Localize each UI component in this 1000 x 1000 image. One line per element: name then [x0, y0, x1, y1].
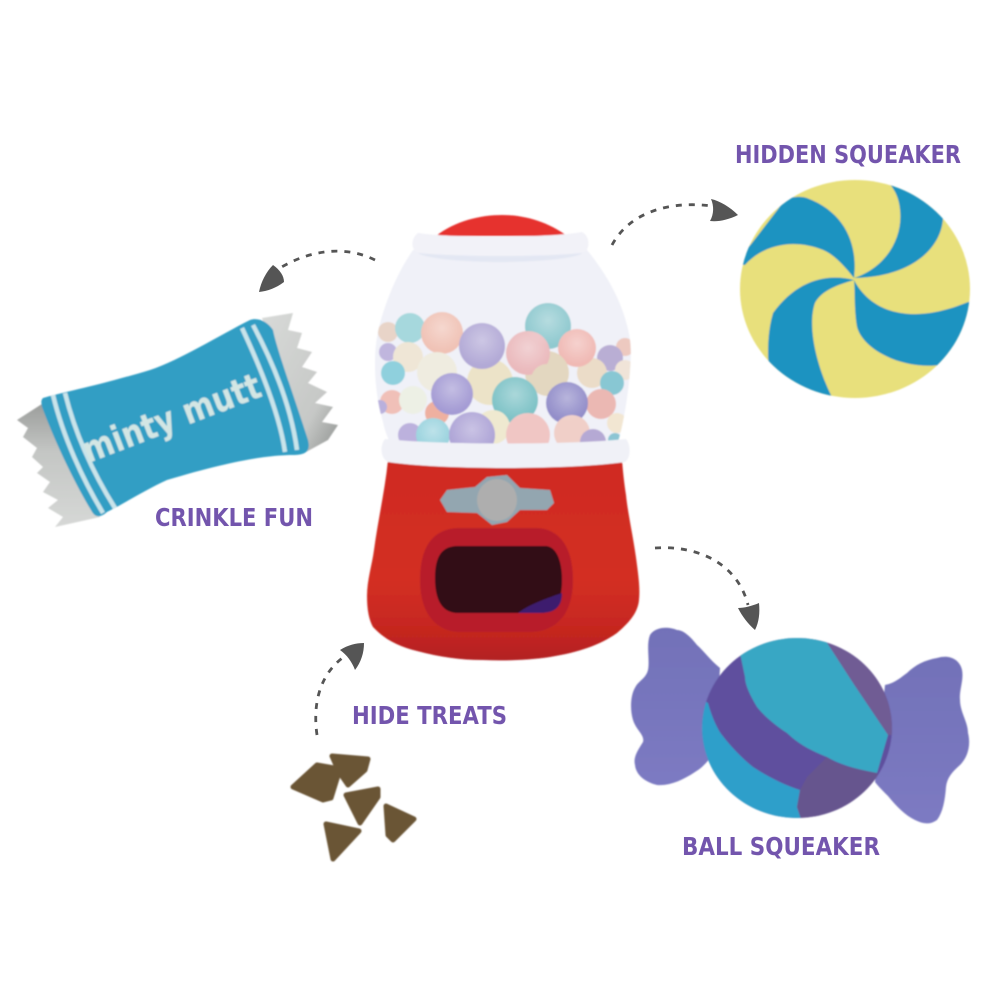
white band — [382, 439, 630, 468]
heading: ball squeaker: BALL SQUEAKER — [682, 832, 880, 861]
wrapper body — [41, 319, 309, 516]
silver badge — [440, 475, 554, 525]
gumballs — [378, 302, 632, 444]
white collar — [412, 232, 588, 256]
glass globe — [375, 250, 631, 445]
arrow: to gumball opening — [316, 643, 364, 735]
red base — [367, 460, 639, 660]
icon: gumball machine plush — [367, 215, 639, 660]
heading: hide treats: HIDE TREATS — [352, 701, 507, 730]
left wing — [631, 628, 720, 785]
arrow: to crinkle candy — [259, 251, 375, 292]
red top cap — [436, 215, 567, 236]
wrapper right silver end — [262, 313, 338, 452]
wrapper left silver end — [17, 402, 100, 527]
collar shadow — [418, 253, 582, 262]
icon: minty mutt crinkle wrapper — [17, 313, 338, 527]
treat opening — [420, 528, 573, 632]
icon: purple ball candy plush — [631, 628, 969, 825]
icon: treats — [293, 756, 414, 859]
gumball highlights — [419, 304, 591, 443]
heading: crinkle fun: CRINKLE FUN — [155, 503, 313, 532]
wrapper logo: minty mutt — [77, 366, 267, 472]
right wing — [875, 657, 969, 823]
ball body — [702, 636, 892, 820]
icon: swirl candy plush — [739, 179, 971, 399]
arrow: to swirl candy — [612, 199, 738, 245]
arrow: to purple candy — [655, 548, 759, 630]
heading: hidden squeaker: HIDDEN SQUEAKER — [735, 140, 961, 169]
wrapper stripes — [53, 325, 297, 513]
